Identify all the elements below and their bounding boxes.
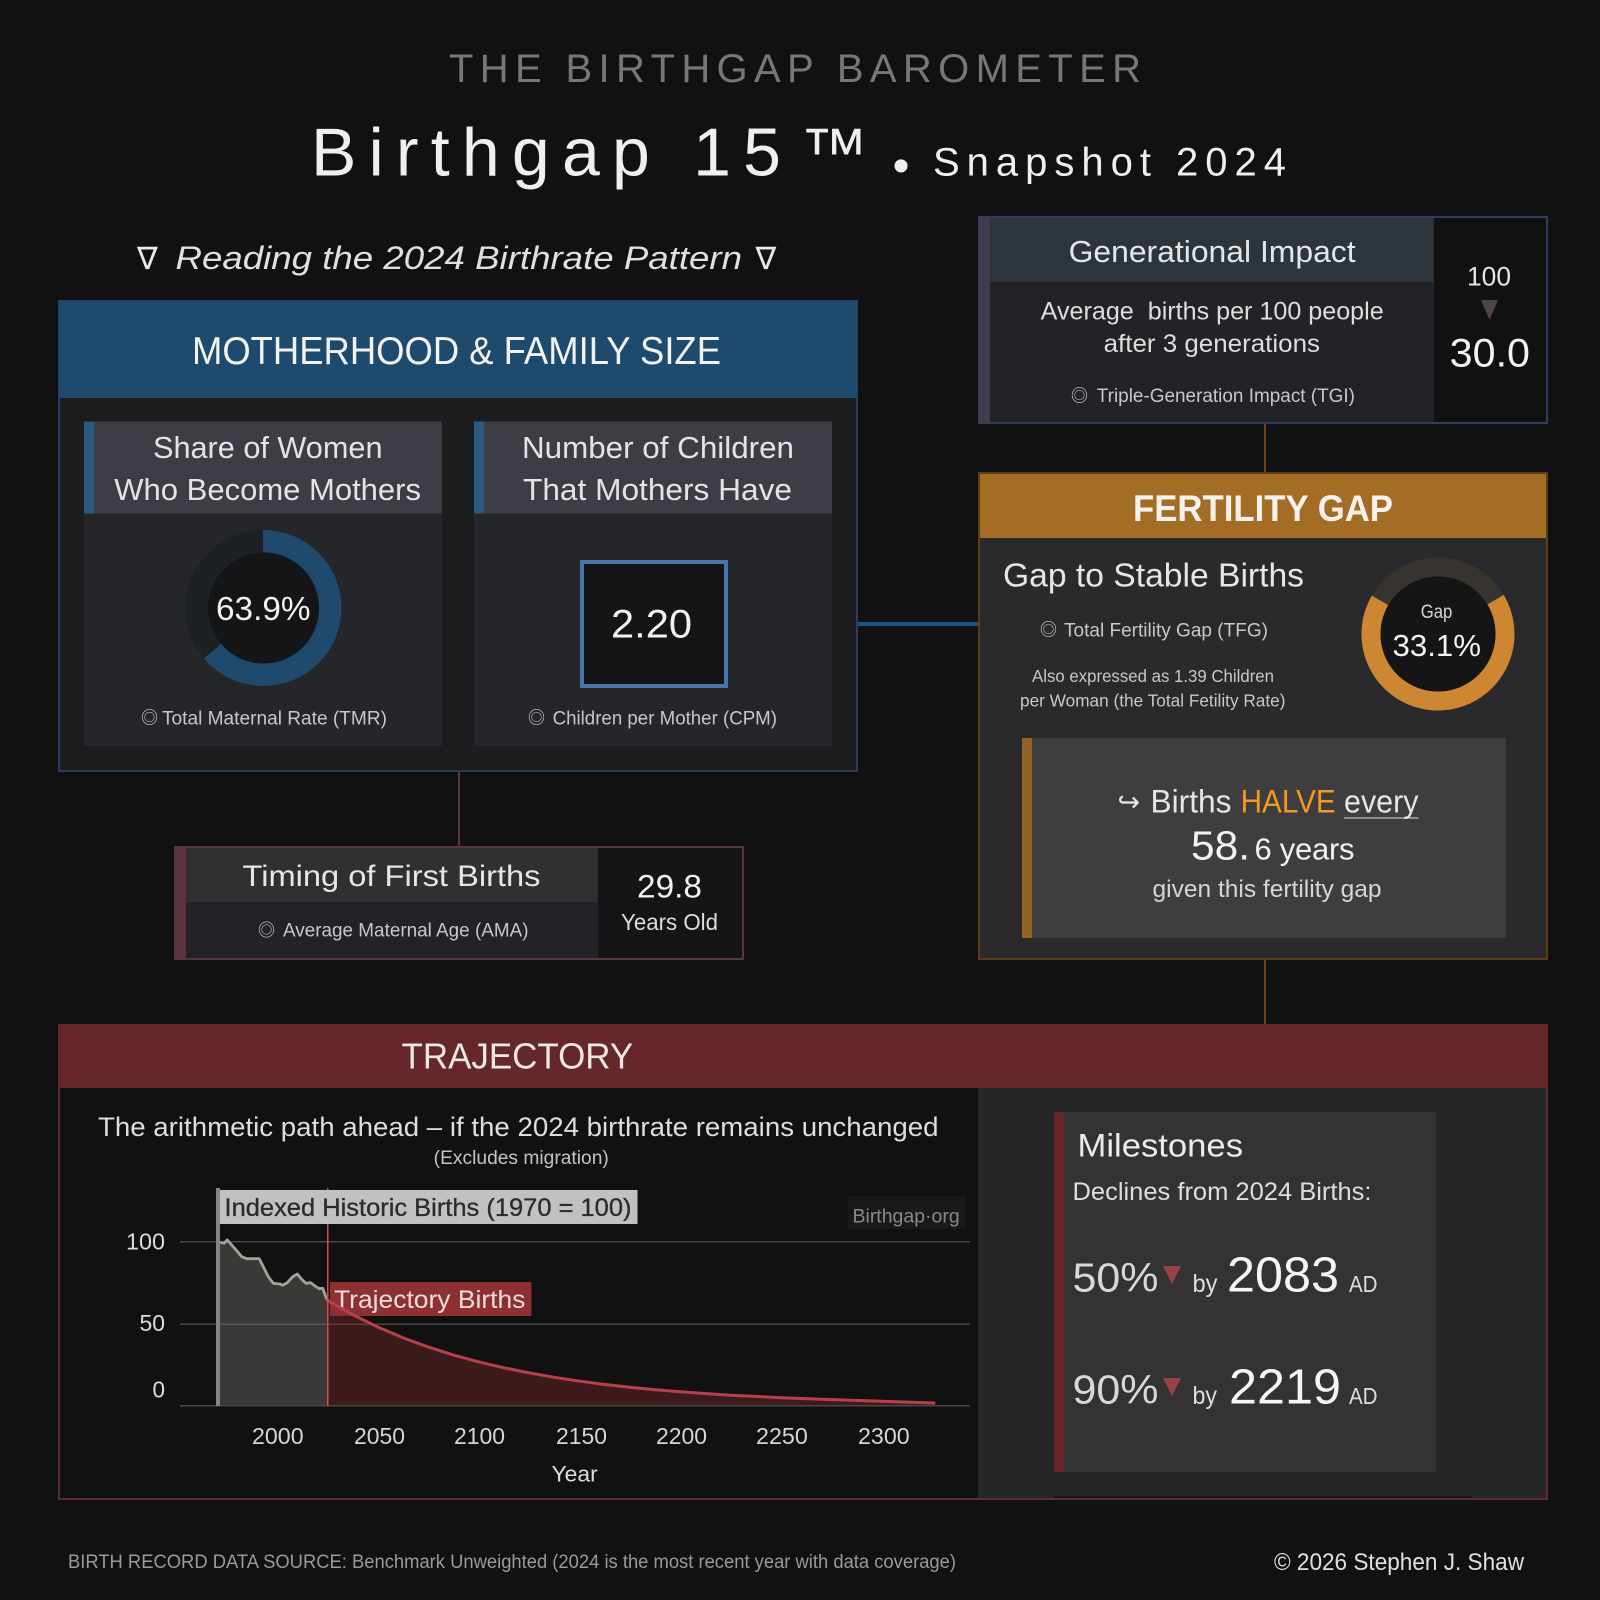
note: total fertility rate: Also expressed as 1.39 Children [1032, 666, 1274, 686]
section heading: reading the pattern: ∇ [136, 241, 158, 277]
y axis labels: 100 [126, 1228, 165, 1254]
x axis labels: 2300 [858, 1423, 910, 1449]
card: share of women who become mothers: Share of Women [153, 430, 382, 465]
y axis labels [126, 1228, 165, 1402]
value: 100 down to 30.0: 30.0 [1450, 332, 1530, 376]
callout: births halve: given this fertility gap [1152, 876, 1382, 903]
header band [59, 301, 857, 398]
footer: data source: BIRTH RECORD DATA SOURCE: Benchmark Unweighted (2024 is the most recent year with data coverage) [68, 1552, 956, 1573]
callout: births halve: 58. [1191, 822, 1250, 868]
value: 100 down to 30.0: 100 [1467, 262, 1511, 292]
area: projected trajectory [328, 1300, 934, 1405]
x axis labels: 2200 [656, 1423, 707, 1449]
panel: trajectory [58, 1024, 1548, 1499]
milestone: 50 percent by 2083 [1072, 1249, 1378, 1303]
main title: ™ [800, 114, 868, 190]
x axis labels: Year [552, 1462, 598, 1487]
main title: • [893, 140, 909, 193]
value box: children per mother [582, 562, 726, 686]
milestone: 90 percent by 2219: AD [1349, 1383, 1378, 1409]
footer: copyright: © 2026 Stephen J. Shaw [1274, 1549, 1525, 1576]
value: 29.8 years old: 29.8 [637, 869, 702, 905]
milestone: 50 percent by 2083: AD [1349, 1271, 1378, 1297]
x axis labels: 2050 [354, 1423, 405, 1449]
connector: motherhood to fertility gap [856, 622, 980, 626]
section heading: reading the pattern: ∇ [754, 241, 776, 277]
card: share of women who become mothers [84, 422, 442, 746]
header band [58, 1024, 1548, 1088]
milestone: 90 percent by 2219: by [1192, 1382, 1217, 1410]
area: historic births [220, 1240, 328, 1405]
area chart: births index [126, 1188, 970, 1487]
main title: Birthgap 15 [311, 114, 781, 190]
label: trajectory births: Trajectory Births [334, 1286, 525, 1314]
header band [980, 474, 1546, 538]
accent rule under milestones [1054, 1496, 1472, 1498]
card: share of women who become mothers: Who Become Mothers [114, 472, 421, 507]
value: 29.8 years old: Years Old [621, 909, 718, 935]
milestone: 50 percent by 2083: by [1192, 1270, 1218, 1298]
x axis labels: 2100 [454, 1423, 505, 1449]
heading: gap to stable births: Gap to Stable Births [1003, 557, 1304, 594]
value: 29.8 years old [621, 869, 718, 935]
caption: average maternal age: ◎ [258, 916, 275, 941]
milestone: 90 percent by 2219 [1072, 1361, 1378, 1415]
donut: total maternal rate [186, 530, 342, 686]
watermark: birthgap.org: Birthgap·org [852, 1207, 960, 1228]
donut: gap 33.1%: Gap [1421, 602, 1452, 623]
card: number of children that mothers have: That Mothers Have [523, 472, 792, 507]
callout: births halve [1022, 738, 1506, 938]
description: after 3 generations [1104, 330, 1320, 358]
card: milestones: Declines from 2024 Births: [1072, 1178, 1372, 1206]
eyebrow title: THE BIRTHGAP BAROMETER [449, 47, 1141, 91]
connector: motherhood to timing [458, 770, 460, 848]
donut: gap 33.1% [1346, 542, 1530, 726]
caption: average maternal age: Average Maternal Age (AMA) [283, 920, 528, 941]
milestones background [978, 1088, 1546, 1498]
main title [311, 114, 1286, 193]
caption: total maternal rate: Total Maternal Rate (TMR) [162, 708, 387, 730]
value: 100 down to 30.0 [1450, 262, 1530, 376]
x axis labels: 2250 [756, 1423, 808, 1449]
x axis labels: 2150 [556, 1423, 607, 1449]
panel: motherhood and family size [59, 301, 857, 771]
y axis labels: 50 [140, 1310, 165, 1336]
note: total fertility rate [1020, 666, 1286, 710]
caption: children per mother: Children per Mother (CPM) [553, 708, 777, 730]
panel: generational impact [978, 216, 1547, 424]
callout: births halve: Births [1150, 784, 1232, 820]
value box: children per mother: 2.20 [611, 602, 692, 646]
marker: start of series [216, 1188, 220, 1406]
donut: total maternal rate: 63.9% [216, 590, 310, 627]
card: number of children that mothers have: Number of Children [522, 430, 794, 465]
card: number of children that mothers have [474, 422, 832, 746]
caption: total fertility gap: ◎ [1040, 616, 1057, 640]
caption: total fertility gap: Total Fertility Gap (TFG) [1064, 620, 1268, 642]
header band: MOTHERHOOD & FAMILY SIZE [192, 330, 721, 373]
label: indexed historic births: Indexed Historic Births (1970 = 100) [224, 1194, 632, 1222]
description: Average births per 100 people [1041, 298, 1384, 326]
callout: births halve: every [1344, 784, 1418, 820]
connector: generational impact to fertility gap [1264, 422, 1266, 474]
panel: fertility gap [979, 473, 1547, 959]
watermark: birthgap.org [848, 1196, 966, 1229]
heading: Generational Impact [1069, 234, 1356, 269]
marker: 2024 [327, 1188, 328, 1406]
header band: FERTILITY GAP [1133, 488, 1393, 529]
callout: births halve: HALVE [1241, 784, 1336, 820]
panel: timing of first births [174, 846, 743, 960]
milestone: 50 percent by 2083: 2083 [1227, 1249, 1339, 1303]
chart heading [98, 1112, 938, 1169]
milestone: 90 percent by 2219: 2219 [1229, 1361, 1341, 1415]
main title: Snapshot 2024 [933, 140, 1286, 184]
card: milestones [1054, 1112, 1436, 1472]
donut: gap 33.1%: 33.1% [1392, 628, 1481, 663]
note: total fertility rate: per Woman (the Total Fetility Rate) [1020, 690, 1286, 710]
milestone: 90 percent by 2219: 90% [1072, 1367, 1158, 1413]
y axis labels: 0 [152, 1376, 165, 1402]
caption: total maternal rate: ◎ [141, 704, 158, 728]
chart heading: (Excludes migration) [434, 1148, 609, 1169]
caption: triple-generation impact: ◎ [1071, 382, 1088, 406]
caption: children per mother: ◎ [528, 704, 545, 728]
section heading: reading the pattern: Reading the 2024 Birthrate Pattern [176, 240, 742, 276]
header band: TRAJECTORY [402, 1035, 633, 1076]
connector: fertility gap to trajectory [1264, 958, 1266, 1026]
chart heading: The arithmetic path ahead – if the 2024 birthrate remains unchanged [98, 1112, 938, 1142]
x axis labels: 2000 [252, 1423, 304, 1449]
heading: Timing of First Births [242, 860, 540, 893]
milestone: 50 percent by 2083: 50% [1072, 1255, 1158, 1301]
card: milestones: Milestones [1078, 1128, 1243, 1164]
callout: births halve: 6 years [1254, 832, 1354, 866]
description [1041, 298, 1384, 358]
caption: triple-generation impact: Triple-Generation Impact (TGI) [1097, 386, 1355, 407]
x axis labels [252, 1423, 910, 1487]
callout: births halve: ↪ [1118, 787, 1140, 818]
